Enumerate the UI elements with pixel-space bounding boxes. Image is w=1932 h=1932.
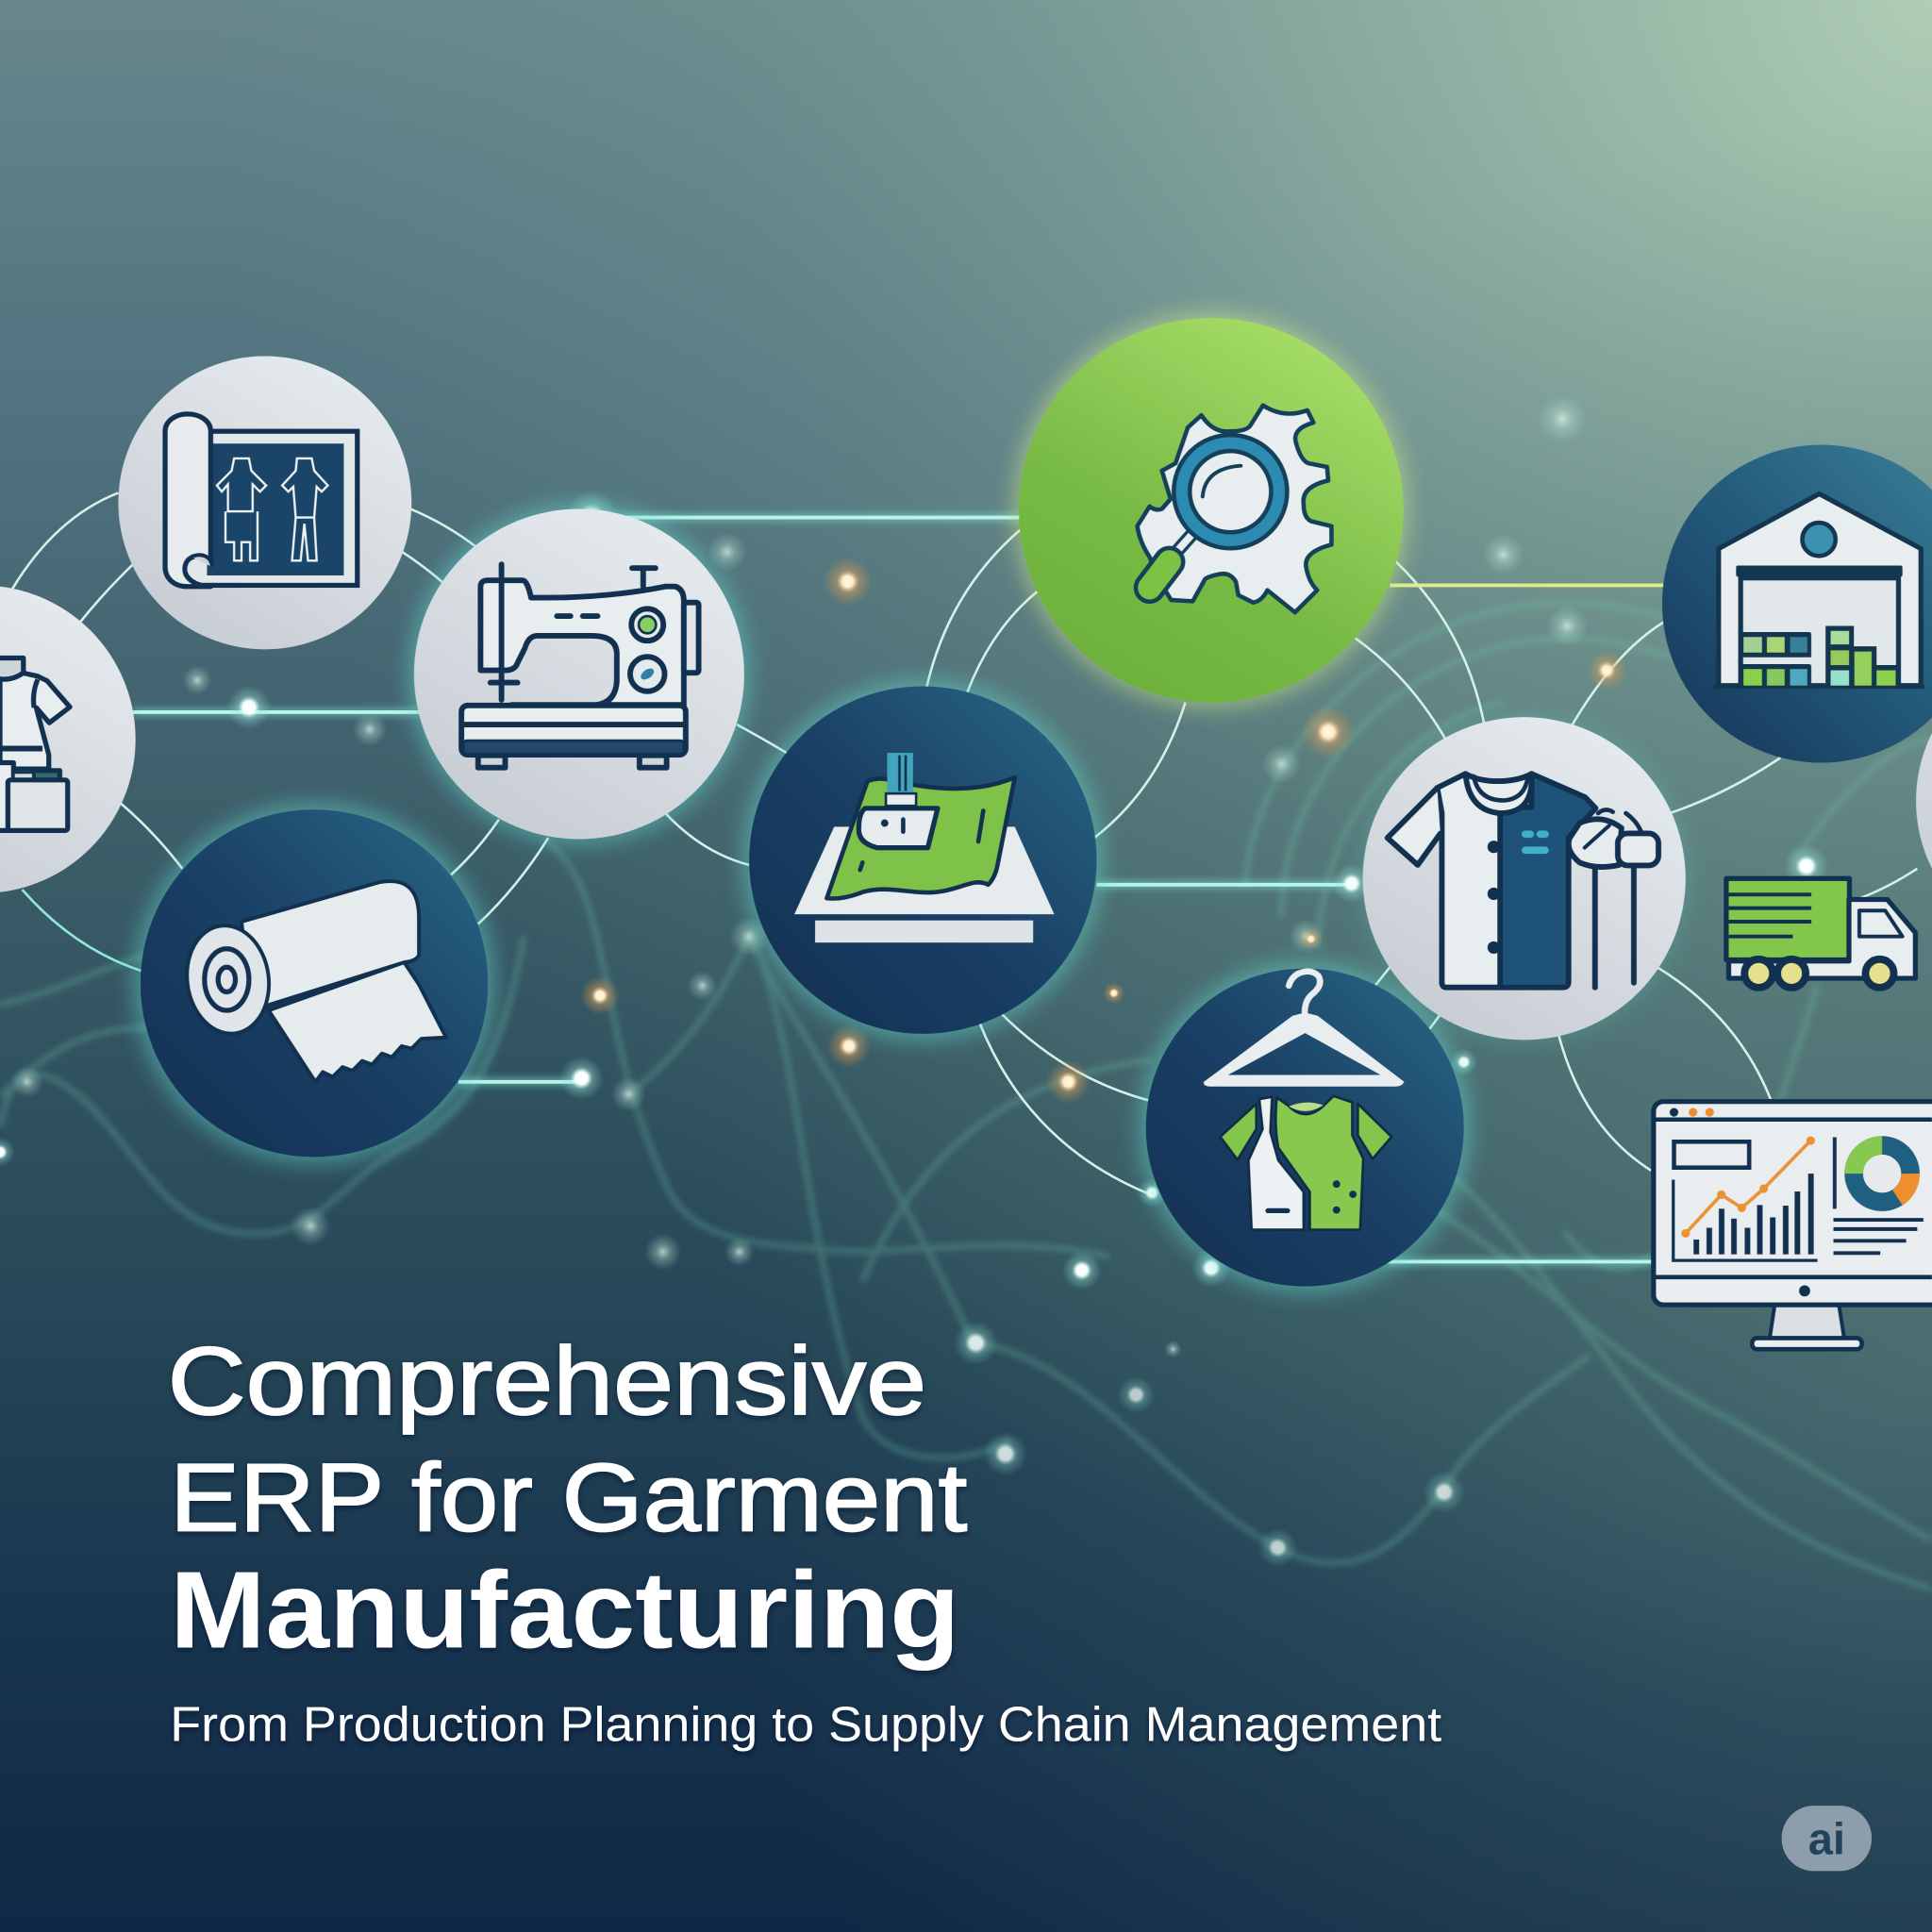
warehouse stock boxes (1743, 626, 1898, 687)
icon: sewing machine (461, 564, 699, 768)
title: Comprehensive (168, 1327, 926, 1435)
panel: finished shirt circle (1363, 717, 1686, 1040)
icon: warehouse building (1713, 493, 1924, 689)
ai badge: ai (1808, 1814, 1845, 1864)
panel: fabric roll circle (141, 809, 488, 1157)
ai badge (1782, 1806, 1872, 1871)
panel: cut and sewing glow halos (134, 504, 1687, 1292)
glowing horizontal links (133, 518, 1663, 1261)
panel: right edge circle (1916, 649, 1932, 953)
icon: gear with magnifier (1138, 406, 1331, 612)
icon: fabric roll (180, 881, 446, 1082)
panel: hanger circle (1146, 969, 1464, 1287)
icon: analytics dashboard monitor (1654, 1102, 1932, 1349)
panel: inventory circle, left edge (0, 585, 136, 893)
title: ERP for Garment (170, 1444, 967, 1552)
title: Manufacturing (170, 1548, 959, 1671)
icon: cutting table with fabric (794, 753, 1055, 942)
subtitle: From Production Planning to Supply Chain Management (170, 1698, 1442, 1753)
icon: hanger with green shirt (1204, 972, 1404, 1230)
panel: pattern design circle (118, 356, 411, 649)
icon: folded shirt and box (0, 658, 70, 830)
connector arcs (12, 492, 1917, 1195)
icon: delivery truck (1726, 878, 1915, 988)
panel: warehouse circle (1662, 445, 1932, 762)
icon: blueprint roll with garments (165, 414, 358, 587)
background network curves (0, 603, 1932, 1590)
glowing nodes (0, 394, 1828, 1567)
panel: quality control circle (1014, 313, 1408, 708)
panel: cutting table circle (749, 687, 1096, 1034)
panel: sewing machine circle (414, 508, 744, 839)
title (168, 1327, 967, 1671)
icon: shirt with tag (1388, 774, 1658, 988)
